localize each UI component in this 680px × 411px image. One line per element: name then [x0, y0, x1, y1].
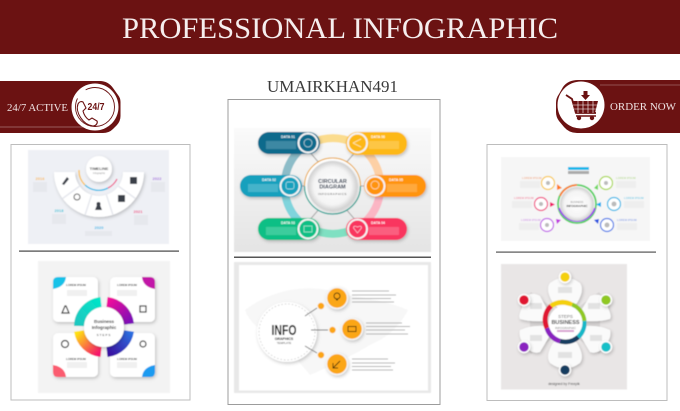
panel: right: [487, 144, 667, 400]
step card text: LOREM IPSUM: [66, 283, 87, 287]
radial labels: [514, 176, 644, 222]
timeline hub: TIMELINE: [90, 166, 109, 171]
ring center: INFOGRAPHIC: [555, 326, 577, 330]
step card text: [66, 283, 138, 368]
colored ring: [545, 302, 584, 342]
outer ring: [285, 138, 380, 234]
timeline labels: 2020: [95, 225, 104, 230]
radial label lines: [512, 181, 644, 230]
info graphics template: [234, 262, 431, 393]
step corner tabs: [53, 277, 155, 377]
radial nodes: [534, 176, 620, 232]
step ring center: STEPS: [97, 333, 111, 337]
step card text: LOREM IPSUM: [117, 357, 138, 361]
title: PROFESSIONAL INFOGRAPHIC: [122, 12, 558, 45]
timeline labels: 2021: [134, 209, 143, 214]
timeline icons: [62, 177, 137, 210]
info hub: INFO: [272, 322, 297, 339]
credit: designed by Freepik: [548, 382, 580, 386]
divider: [234, 256, 431, 258]
data pills: [240, 132, 426, 240]
timeline hub: Infographic: [93, 172, 106, 175]
pill glyphs: [286, 139, 379, 233]
step ring center: Infographic: [92, 325, 117, 330]
step cards: [53, 277, 155, 377]
pill labels: DATA 04: [371, 221, 385, 225]
hub: [304, 158, 360, 214]
radial labels: LOREM IPSUM: [617, 218, 637, 222]
petal text lines: [530, 287, 602, 358]
info hub: GRAPHICS: [275, 337, 294, 341]
ring center: BUSINESS: [551, 320, 580, 326]
steps business infographic: [501, 264, 627, 390]
divider: [496, 252, 656, 253]
spokes: [300, 150, 365, 222]
step card text: LOREM IPSUM: [117, 283, 138, 287]
icon: phone 24/7: 24/7: [88, 102, 105, 113]
timeline labels: [36, 176, 162, 230]
timeline label lines: [33, 182, 165, 236]
pill labels: DATA 03: [281, 221, 295, 225]
radial hub: INFOGRAPHIC: [566, 204, 588, 208]
orange icon circles: [326, 288, 362, 374]
circular diagram infographic: [234, 128, 431, 252]
radial labels: LOREM IPSUM: [616, 176, 636, 180]
connector arrows: [305, 308, 328, 353]
step ring center: Business: [94, 319, 114, 324]
pill labels: DATA 05: [389, 178, 403, 182]
step card text: LOREM IPSUM: [66, 357, 87, 361]
hub: CIRCULAR: [318, 179, 347, 185]
username heading: UMAIRKHAN491: [267, 77, 398, 96]
timeline labels: 2018: [55, 208, 64, 213]
badge: 24/7 active: 24/7 ACTIVE: [7, 103, 68, 114]
divider: [19, 250, 179, 252]
fan segments: [54, 172, 144, 217]
icon: shopping cart: [558, 82, 604, 128]
badge: 24/7 active: [0, 81, 120, 133]
step ring center: [84, 307, 124, 347]
pill labels: DATA 01: [281, 135, 295, 139]
timeline colored arc: [79, 170, 117, 190]
badge: order now: [556, 80, 680, 133]
hub: INFOGRAPHICS: [318, 192, 347, 196]
step ring: [79, 302, 129, 352]
timeline labels: 2022: [153, 176, 162, 181]
radial hub: BUSINESS: [571, 201, 584, 204]
radial arrows: [550, 184, 601, 224]
info hub: TEMPLATE: [277, 341, 291, 345]
header banner: [0, 0, 680, 54]
radial labels: LOREM IPSUM: [521, 218, 541, 222]
cross bands: [528, 296, 602, 350]
pill labels: [262, 135, 403, 225]
world map: [245, 288, 408, 375]
pill body lines: [248, 141, 417, 235]
ring center: [548, 306, 582, 340]
ring center: STEPS: [558, 314, 573, 319]
pill labels: DATA 06: [371, 135, 385, 139]
orange circle icons: [333, 293, 356, 368]
radial heading: [568, 167, 589, 174]
petals: [519, 278, 611, 368]
radial labels: LOREM IPSUM: [514, 196, 534, 200]
business infographic steps: [38, 261, 170, 393]
radial node glyphs: [539, 181, 616, 228]
pill labels: DATA 02: [262, 178, 276, 182]
radial labels: LOREM IPSUM: [522, 176, 542, 180]
pill icons: [280, 134, 384, 238]
radial hub: [558, 185, 596, 223]
timeline hub: [86, 156, 112, 182]
timeline infographic: [28, 150, 169, 244]
step badges: [518, 272, 612, 376]
hub: DIAGRAM: [319, 184, 346, 190]
connector dots: [318, 303, 336, 358]
info text lines: [352, 291, 410, 370]
panel: left: [11, 144, 190, 400]
badge: order now: ORDER NOW: [610, 101, 677, 113]
radial labels: LOREM IPSUM: [624, 196, 644, 200]
panel: center: [228, 100, 440, 404]
timeline labels: 2016: [36, 176, 45, 181]
info hub: [257, 302, 317, 362]
step icons: [62, 306, 146, 348]
business infographic radial: [501, 157, 650, 241]
